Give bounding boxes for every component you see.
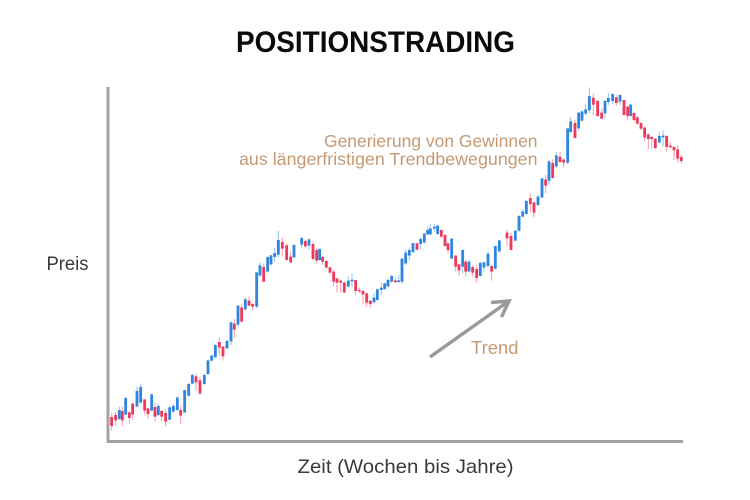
chart axes (108, 87, 683, 442)
candlestick chart (112, 87, 681, 431)
x axis label: Zeit (Wochen bis Jahre) (298, 456, 514, 478)
callout: gains from long-term trend moves: Generierung von Gewinnen (324, 131, 538, 151)
trend label: Trend (471, 338, 518, 358)
title: POSITIONSTRADING (236, 26, 515, 59)
callout: gains from long-term trend moves: aus längerfristigen Trendbewegungen (239, 149, 538, 169)
arrow: trend direction (430, 301, 509, 357)
y axis label: Preis (46, 253, 89, 275)
